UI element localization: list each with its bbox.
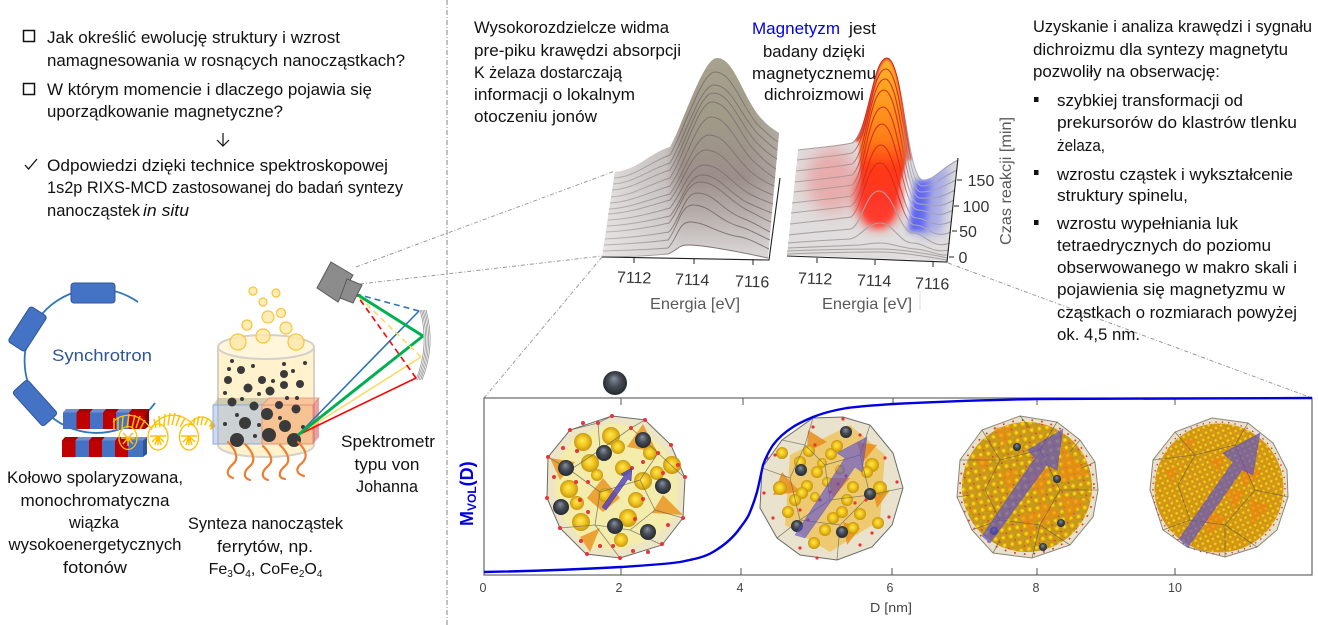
axis: reaction time: 100: [963, 199, 989, 216]
text block: magnetism description: magnetycznemu: [752, 65, 876, 83]
nanoparticle 8 nm: [957, 416, 1098, 558]
answer: 1s2p RIXS-MCD zastosowanej do badań syntezy: [47, 179, 404, 197]
nanoparticle 4.5 nm: [760, 417, 903, 560]
bullet 2: [1034, 166, 1293, 205]
axis labels: 6: [887, 581, 894, 595]
answer: nanocząstek: [47, 202, 141, 220]
question 1: namagnesowania w rosnących nanocząstkach?: [47, 52, 405, 70]
axis labels: 10: [1168, 581, 1182, 595]
arrow: magnetic moment: [1179, 433, 1260, 547]
axis labels: D [nm]: [870, 601, 912, 615]
arrow: down to answer: [217, 133, 229, 146]
axes frame: [484, 398, 1312, 575]
bullet 3: [1034, 215, 1297, 344]
label: spectrometer: typu von: [354, 456, 420, 474]
label: synthesis: [188, 515, 344, 580]
text block: observations: [1033, 18, 1312, 344]
answer: [25, 157, 404, 220]
label: synthesis: O: [304, 561, 317, 578]
text block: magnetism description: Magnetyzm: [752, 20, 840, 38]
label: synthesis: O: [233, 561, 245, 578]
bullet 2: struktury spinelu,: [1057, 187, 1188, 205]
text block: observations: Uzyskanie i analiza krawędzi i sygnału: [1033, 18, 1312, 36]
y axis title: M: [457, 511, 477, 526]
bullet 3: pojawienia się magnetyzmu w: [1057, 281, 1285, 299]
axis: energy, left spectrum: Energia [eV]: [650, 296, 740, 313]
axis: energy, right spectrum: [787, 158, 958, 313]
heat waves: [228, 442, 306, 480]
bullet 3: wzrostu wypełniania luk: [1056, 215, 1239, 233]
question 1: Jak określić ewolucję struktury i wzrost: [47, 29, 340, 47]
text block: magnetism description: [752, 20, 876, 104]
label: beam: monochromatyczna: [20, 492, 170, 510]
diagram: emission rays and analyser: [298, 294, 430, 435]
arrow: magnetic moment: [982, 429, 1063, 543]
axis: reaction time: Czas reakcji [min]: [998, 117, 1015, 245]
axis: reaction time: 0: [959, 250, 968, 267]
label: spectrometer: [341, 433, 436, 496]
text block: XANES description: otoczeniu jonów: [474, 108, 597, 126]
bullet 1: [1034, 92, 1297, 155]
bubbles: [230, 287, 304, 350]
icon: grey sphere above chart: [603, 371, 627, 395]
axis: energy, right spectrum: 7116: [915, 275, 950, 294]
zoom lines from camera and spectra to the chart: [356, 171, 1312, 398]
label: spectrometer: Spektrometr: [341, 433, 436, 451]
text block: XANES description: Wysokorozdzielcze widma: [474, 19, 670, 37]
axis: energy, left spectrum: 7116: [735, 273, 770, 292]
arrow: small moment: [602, 468, 632, 510]
chart: magnetic dichroism waterfall spectra: [787, 58, 1015, 313]
label: beam: Kołowo spolaryzowana,: [7, 469, 183, 487]
vessel body: [218, 335, 314, 457]
text block: XANES description: pre-piku krawędzi absorpcji: [474, 42, 681, 60]
label: synthesis: , CoFe: [251, 561, 299, 578]
diagram: undulator magnets: [62, 409, 149, 457]
question 2: W którym momencie i dlaczego pojawia się: [47, 81, 372, 99]
axis labels: 8: [1033, 581, 1040, 595]
bullet 1: prekursorów do klastrów tlenku: [1057, 114, 1297, 132]
axis: energy, left spectrum: [602, 178, 780, 313]
bullet 2: wzrostu cząstek i wykształcenie: [1056, 166, 1293, 184]
arrow: growing moment: [795, 437, 867, 538]
axis labels: 2: [616, 581, 623, 595]
particles: [223, 359, 307, 447]
axis: energy, left spectrum: 7114: [675, 271, 710, 290]
y axis title: (D): [457, 461, 477, 486]
axis labels: [480, 581, 1182, 615]
bullet 1: szybkiej transformacji od: [1057, 92, 1243, 110]
divider: vertical dashed line: [446, 0, 448, 625]
label: beam: wysokoenergetycznych: [7, 536, 182, 554]
text block: XANES description: informacji o lokalnym: [474, 86, 635, 104]
nanoparticle 2 nm: [545, 414, 687, 560]
question 2: [24, 81, 372, 121]
bullet 3: tetraedrycznych do poziomu: [1057, 237, 1271, 255]
bullet 1: żelaza,: [1057, 137, 1105, 155]
label: synthesis: 2: [299, 569, 305, 580]
axis: energy, right spectrum: Energia [eV]: [822, 296, 912, 313]
bullet 3: obserwowanego w makro skali i: [1057, 259, 1297, 277]
icon: detector camera: [317, 262, 362, 303]
axis: reaction time: 50: [959, 224, 977, 241]
probed volumes: [213, 398, 319, 444]
diagram: polarised photon beam: [113, 413, 215, 450]
axis: energy, right spectrum: 7112: [798, 270, 833, 289]
y axis title: VOL: [465, 486, 479, 511]
label: spectrometer: Johanna: [356, 478, 419, 496]
chart: absorption pre-edge waterfall spectra: [602, 58, 780, 313]
curve: volume magnetisation: [484, 398, 1312, 572]
answer: Odpowiedzi dzięki technice spektroskopowej: [47, 157, 388, 175]
chart: magnetisation vs particle size: [457, 398, 1312, 615]
label: Synchrotron: Synchrotron: [52, 346, 152, 365]
bullet 3: cząstkach o rozmiarach powyżej: [1057, 304, 1297, 322]
label: synthesis: 3: [227, 569, 233, 580]
label: beam: fotonów: [63, 559, 127, 577]
diagram: reaction vessel with nanoparticles: [213, 287, 319, 480]
text block: magnetism description: jest: [848, 20, 876, 38]
bullet 3: ok. 4,5 nm.: [1057, 326, 1140, 344]
label: synthesis: ferrytów, np.: [217, 538, 313, 556]
axis: energy, right spectrum: 7114: [857, 272, 892, 291]
label: beam: wiązka: [68, 514, 120, 532]
text block: XANES description: K żelaza dostarczają: [474, 64, 623, 82]
answer: in situ: [143, 202, 189, 220]
axis labels: 0: [480, 581, 487, 595]
axis: energy, left spectrum: 7112: [617, 269, 652, 288]
label: synthesis: 4: [245, 569, 251, 580]
question 1: [24, 29, 405, 70]
label: synthesis: Synteza nanocząstek: [188, 515, 344, 533]
text block: XANES description: [474, 19, 681, 126]
axis: reaction time: [949, 117, 1015, 267]
text block: observations: pozwoliły na obserwację:: [1033, 63, 1220, 81]
axis labels: 4: [737, 581, 744, 595]
label: synthesis: Fe: [209, 561, 227, 578]
text block: magnetism description: dichroizmowi: [764, 86, 864, 104]
diagram: synchrotron ring: [8, 283, 155, 433]
text block: magnetism description: badany dzięki: [763, 43, 865, 61]
axis: reaction time: 150: [968, 173, 994, 190]
nanoparticle 10 nm: [1150, 418, 1288, 557]
label: synthesis: 4: [317, 569, 323, 580]
label: beam: [7, 469, 183, 577]
text block: observations: dichroizmu dla syntezy magnetytu: [1033, 41, 1288, 59]
question 2: uporządkowanie magnetyczne?: [47, 103, 283, 121]
text block: research questions: [24, 29, 405, 220]
analyser crystal: [416, 310, 430, 380]
